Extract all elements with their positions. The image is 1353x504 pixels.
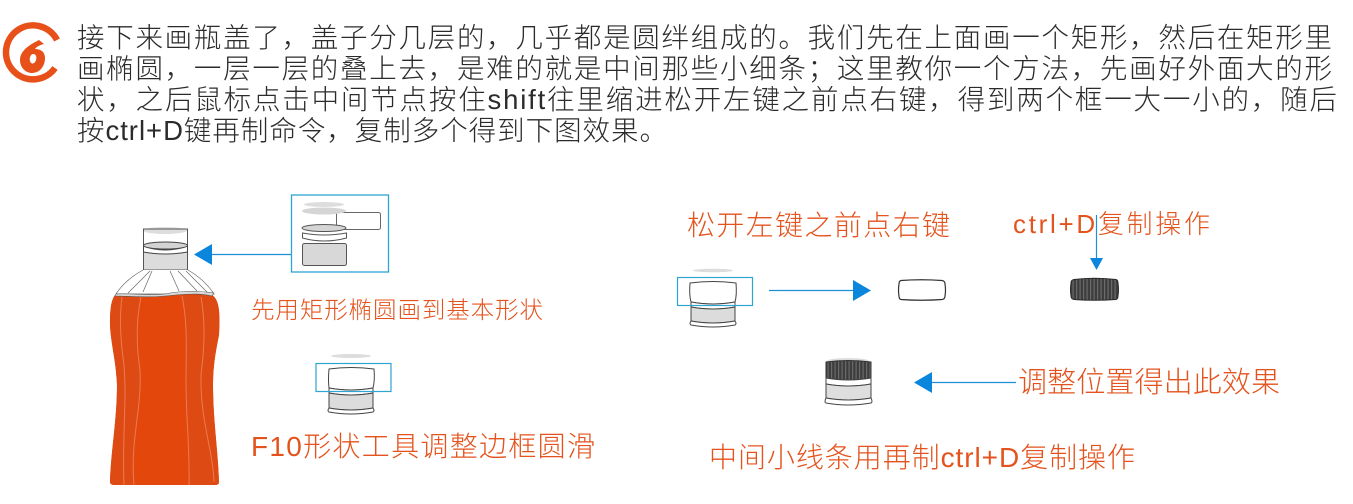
- intro paragraph: 按ctrl+D键再制命令，复制多个得到下图效果。: [77, 115, 667, 146]
- exploded cap box: [292, 195, 388, 272]
- rounded cap with selection box: [316, 354, 391, 414]
- bottle shoulder lines: [116, 270, 214, 294]
- caption: adjust position: 调整位置得出此效果: [1018, 366, 1280, 399]
- step number icon: [6, 25, 57, 79]
- caption: middle strips: 中间小线条用再制ctrl+D复制操作: [709, 442, 1135, 473]
- bottle highlights: [121, 296, 214, 485]
- finished cap: [825, 358, 872, 405]
- illustration: red bottle: [110, 227, 219, 485]
- outlined rounded shape: [898, 280, 946, 300]
- caption: right click: 松开左键之前点右键: [687, 210, 950, 241]
- arrow down to ribbed part: [1090, 215, 1103, 270]
- bottle label band: [115, 291, 214, 297]
- intro paragraph: 接下来画瓶盖了，盖子分几层的，几乎都是圆绊组成的。我们先在上面画一个矩形，然后在矩形里: [77, 22, 1332, 53]
- intro paragraph: 画椭圆，一层一层的叠上去，是难的就是中间那些小细条；这里教你一个方法，先画好外面大的形: [77, 53, 1332, 84]
- arrow to outline shape: [769, 280, 871, 301]
- intro paragraph: [77, 22, 1337, 146]
- bottle body: [110, 294, 219, 485]
- cap with selection box: [678, 269, 752, 327]
- caption: F10 shape tool: F10形状工具调整边框圆滑: [251, 431, 595, 462]
- arrow to bottle cap: [194, 244, 295, 265]
- caption: basic shapes: 先用矩形椭圆画到基本形状: [251, 297, 543, 323]
- ribbed dark cap part: [1070, 278, 1118, 300]
- intro paragraph: 状，之后鼠标点击中间节点按住shift往里缩进松开左键之前点右键，得到两个框一大一小的，随后: [77, 84, 1337, 115]
- bottle darker side panels: [110, 295, 219, 485]
- arrow to finished cap: [914, 372, 1016, 393]
- bottle cap section: [143, 227, 188, 270]
- caption: ctrl+D copy: ctrl+D复制操作: [1013, 209, 1210, 239]
